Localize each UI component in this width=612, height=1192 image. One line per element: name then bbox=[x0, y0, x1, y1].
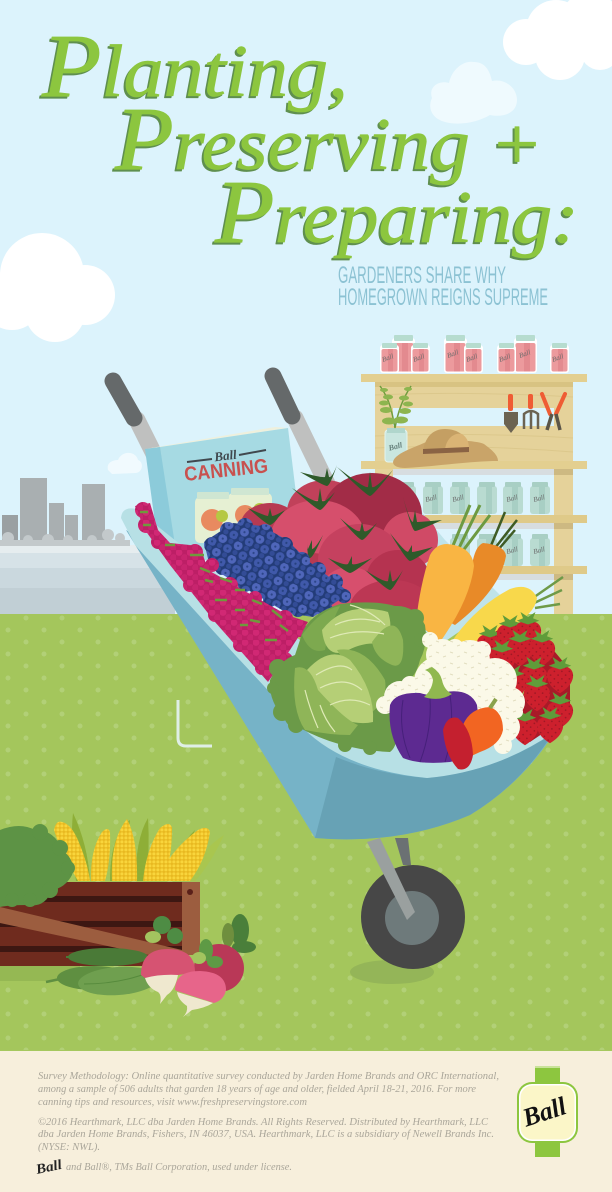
wheel frame bbox=[395, 838, 411, 865]
shelf unit bbox=[361, 335, 587, 614]
book spine bbox=[145, 447, 175, 545]
shelf shadows bbox=[375, 382, 573, 580]
green jars row 1 labels: Ball bbox=[505, 493, 519, 504]
book pages top bbox=[145, 427, 288, 449]
copyright text: dba Jarden Home Brands, Fishers, IN 46037, USA. Hearthmark, LLC is a subsidiary of Newell Brands Inc. bbox=[38, 1129, 494, 1140]
footer top line bbox=[0, 1050, 612, 1051]
tray front panel bbox=[315, 733, 553, 839]
crate brace bbox=[0, 907, 182, 962]
title line 1: Planting, bbox=[39, 19, 346, 118]
green jars row 2 labels bbox=[505, 545, 546, 556]
wheel bbox=[361, 838, 465, 969]
strawberry backing bbox=[478, 622, 570, 742]
plant jar: Ball bbox=[387, 440, 404, 453]
parsnip bbox=[445, 587, 537, 655]
trowel bbox=[504, 394, 518, 433]
tomatoes bbox=[240, 465, 442, 636]
copyright text: ©2016 Hearthmark, LLC dba Jarden Home Brands. All Rights Reserved. Distributed by Hearthmark, LLC bbox=[38, 1117, 489, 1128]
left radish bbox=[141, 949, 195, 1004]
title line 2: Preserving + bbox=[112, 92, 541, 191]
survey methodology text: Survey Methodology: Online quantitative survey conducted by Jarden Home Brands and ORC International, bbox=[38, 1071, 499, 1082]
wheelbarrow handles bbox=[113, 376, 330, 490]
raspberry mass bbox=[135, 502, 308, 682]
pink jar labels: Ball bbox=[465, 352, 479, 364]
big carrot tops bbox=[452, 505, 490, 552]
big carrot bbox=[416, 544, 474, 642]
crate with corn and greens bbox=[0, 813, 224, 981]
lower left leaf bbox=[294, 667, 358, 735]
cabbage base bbox=[267, 602, 428, 755]
title line 2: Preserving + bbox=[114, 90, 543, 189]
title line 3: Preparing: bbox=[214, 163, 579, 262]
orange pepper bbox=[463, 699, 503, 758]
crate shadow bbox=[0, 966, 80, 981]
crate post bbox=[182, 882, 200, 955]
green jars row 1 labels: Ball bbox=[532, 493, 546, 504]
corn leaves bbox=[72, 813, 224, 881]
parsnip tops bbox=[530, 577, 563, 608]
book title: CANNING bbox=[183, 455, 269, 486]
badge strap bbox=[535, 1066, 560, 1157]
green jars row 1 labels bbox=[424, 493, 546, 504]
trademark line: and Ball®, TMs Ball Corporation, used under license. bbox=[66, 1162, 292, 1173]
left handle bbox=[113, 381, 172, 490]
water bands bbox=[0, 545, 175, 618]
center leaf bbox=[337, 649, 385, 712]
upper right leaf bbox=[372, 625, 403, 666]
survey methodology text bbox=[38, 1071, 499, 1108]
copyright text bbox=[38, 1117, 494, 1153]
trees bbox=[0, 529, 130, 546]
corn ears bbox=[54, 819, 210, 881]
cucumbers bbox=[46, 948, 159, 998]
wheel shadow bbox=[350, 960, 434, 984]
subtitle bbox=[338, 262, 548, 311]
raspberry leaves bbox=[140, 512, 288, 640]
wheelbarrow tray bbox=[121, 480, 560, 839]
tools bbox=[504, 394, 565, 433]
buildings bbox=[2, 478, 105, 545]
carrots and parsnip bbox=[416, 505, 563, 655]
pink jar labels: Ball bbox=[498, 352, 512, 364]
sky background bbox=[0, 0, 612, 620]
cloud: middle faint bbox=[430, 62, 517, 124]
radishes bbox=[141, 914, 256, 1017]
pink jar labels: Ball bbox=[381, 352, 395, 364]
trademark line bbox=[34, 1158, 292, 1178]
pink jar labels: Ball bbox=[551, 352, 565, 364]
book logo: Ball bbox=[212, 447, 238, 464]
wheelbarrow stand bbox=[178, 700, 212, 746]
back radish leaves bbox=[222, 914, 256, 953]
Ball logo badge bbox=[517, 1066, 578, 1157]
green jars row 1 labels: Ball bbox=[451, 493, 465, 504]
plant leaves bbox=[379, 386, 413, 428]
crate bolt bbox=[187, 889, 193, 895]
book logo bbox=[187, 447, 266, 464]
plant jar bbox=[385, 428, 407, 462]
blueberries bbox=[204, 518, 351, 618]
hat bbox=[393, 429, 498, 468]
left radish leaves bbox=[145, 916, 183, 944]
crate slats bbox=[0, 896, 182, 952]
tomato back dark bbox=[322, 467, 422, 557]
badge wordmark: Ball bbox=[518, 1091, 570, 1133]
crate body bbox=[0, 882, 182, 966]
green jars row 2 labels: Ball bbox=[532, 545, 546, 556]
raspberries bbox=[135, 502, 308, 682]
pink jar labels: Ball bbox=[518, 348, 532, 360]
right handle bbox=[273, 376, 330, 490]
cloud: left large bbox=[0, 233, 115, 342]
grass ground bbox=[0, 614, 612, 1051]
front cucumber bbox=[77, 964, 159, 998]
tomato lower right dark bbox=[366, 533, 433, 610]
cabbage veins bbox=[305, 605, 385, 732]
middle cucumber bbox=[46, 966, 131, 990]
fork bbox=[524, 394, 538, 429]
tomato center pink bbox=[270, 488, 366, 580]
green jars row 1 labels: Ball bbox=[424, 493, 438, 504]
footer band bbox=[0, 1050, 612, 1192]
tray rim bbox=[121, 508, 560, 778]
greens bbox=[0, 824, 75, 907]
purple pepper bbox=[390, 667, 478, 763]
lower head bbox=[307, 654, 373, 723]
cabbages bbox=[267, 602, 428, 755]
tomato lower pink bbox=[318, 556, 382, 627]
canning book bbox=[145, 427, 300, 560]
book cover bbox=[160, 428, 300, 560]
pruners bbox=[542, 394, 565, 430]
pink jar labels: Ball bbox=[446, 348, 460, 360]
trademark line: Ball bbox=[34, 1158, 63, 1178]
copyright text: (NYSE: NWL). bbox=[38, 1142, 100, 1153]
title line 3: Preparing: bbox=[212, 165, 577, 264]
cloud: top right bbox=[503, 0, 612, 80]
green jars row 2 labels: Ball bbox=[505, 545, 519, 556]
green jars row 2 bbox=[450, 534, 550, 566]
back cucumber bbox=[66, 948, 148, 966]
cloud: small distant bbox=[108, 453, 142, 474]
tomato lower left bbox=[284, 535, 340, 597]
book jars bbox=[195, 488, 272, 543]
distant city skyline bbox=[0, 478, 175, 618]
tomato far left bbox=[240, 503, 300, 551]
survey methodology text: canning tips and resources, visit www.freshpreservingstore.com bbox=[38, 1097, 307, 1108]
tomato right pink bbox=[382, 497, 442, 568]
upper left leaf bbox=[302, 606, 340, 651]
cauliflower bbox=[376, 632, 525, 754]
front radish bbox=[175, 971, 226, 1017]
red chili pepper bbox=[443, 718, 473, 769]
dark carrot tops bbox=[490, 512, 517, 550]
pink jars bbox=[380, 335, 569, 373]
tomato bottom bbox=[350, 570, 434, 636]
back boards bbox=[375, 382, 573, 614]
strawberries bbox=[477, 612, 573, 745]
tomato center dark bbox=[318, 518, 402, 596]
green jars row 1 bbox=[396, 482, 550, 514]
pink jar labels: Ball bbox=[412, 352, 426, 364]
front radish leaves bbox=[192, 939, 223, 968]
badge label bbox=[517, 1082, 578, 1143]
back radish bbox=[194, 944, 244, 992]
upper head bbox=[322, 609, 390, 653]
shelf boards bbox=[361, 374, 587, 574]
title bbox=[39, 17, 579, 264]
pink jar labels bbox=[381, 348, 565, 364]
tray body bbox=[126, 530, 553, 839]
survey methodology text: among a sample of 506 adults that garden 18 years of age and older, fielded April 18-21, 2016. For more bbox=[38, 1084, 476, 1095]
tomato back left bbox=[287, 465, 363, 544]
title line 1: Planting, bbox=[41, 17, 348, 116]
dark carrot bbox=[445, 543, 506, 625]
board shading bbox=[375, 393, 573, 452]
far rim bbox=[350, 480, 505, 645]
strawberry fruits bbox=[477, 612, 573, 745]
